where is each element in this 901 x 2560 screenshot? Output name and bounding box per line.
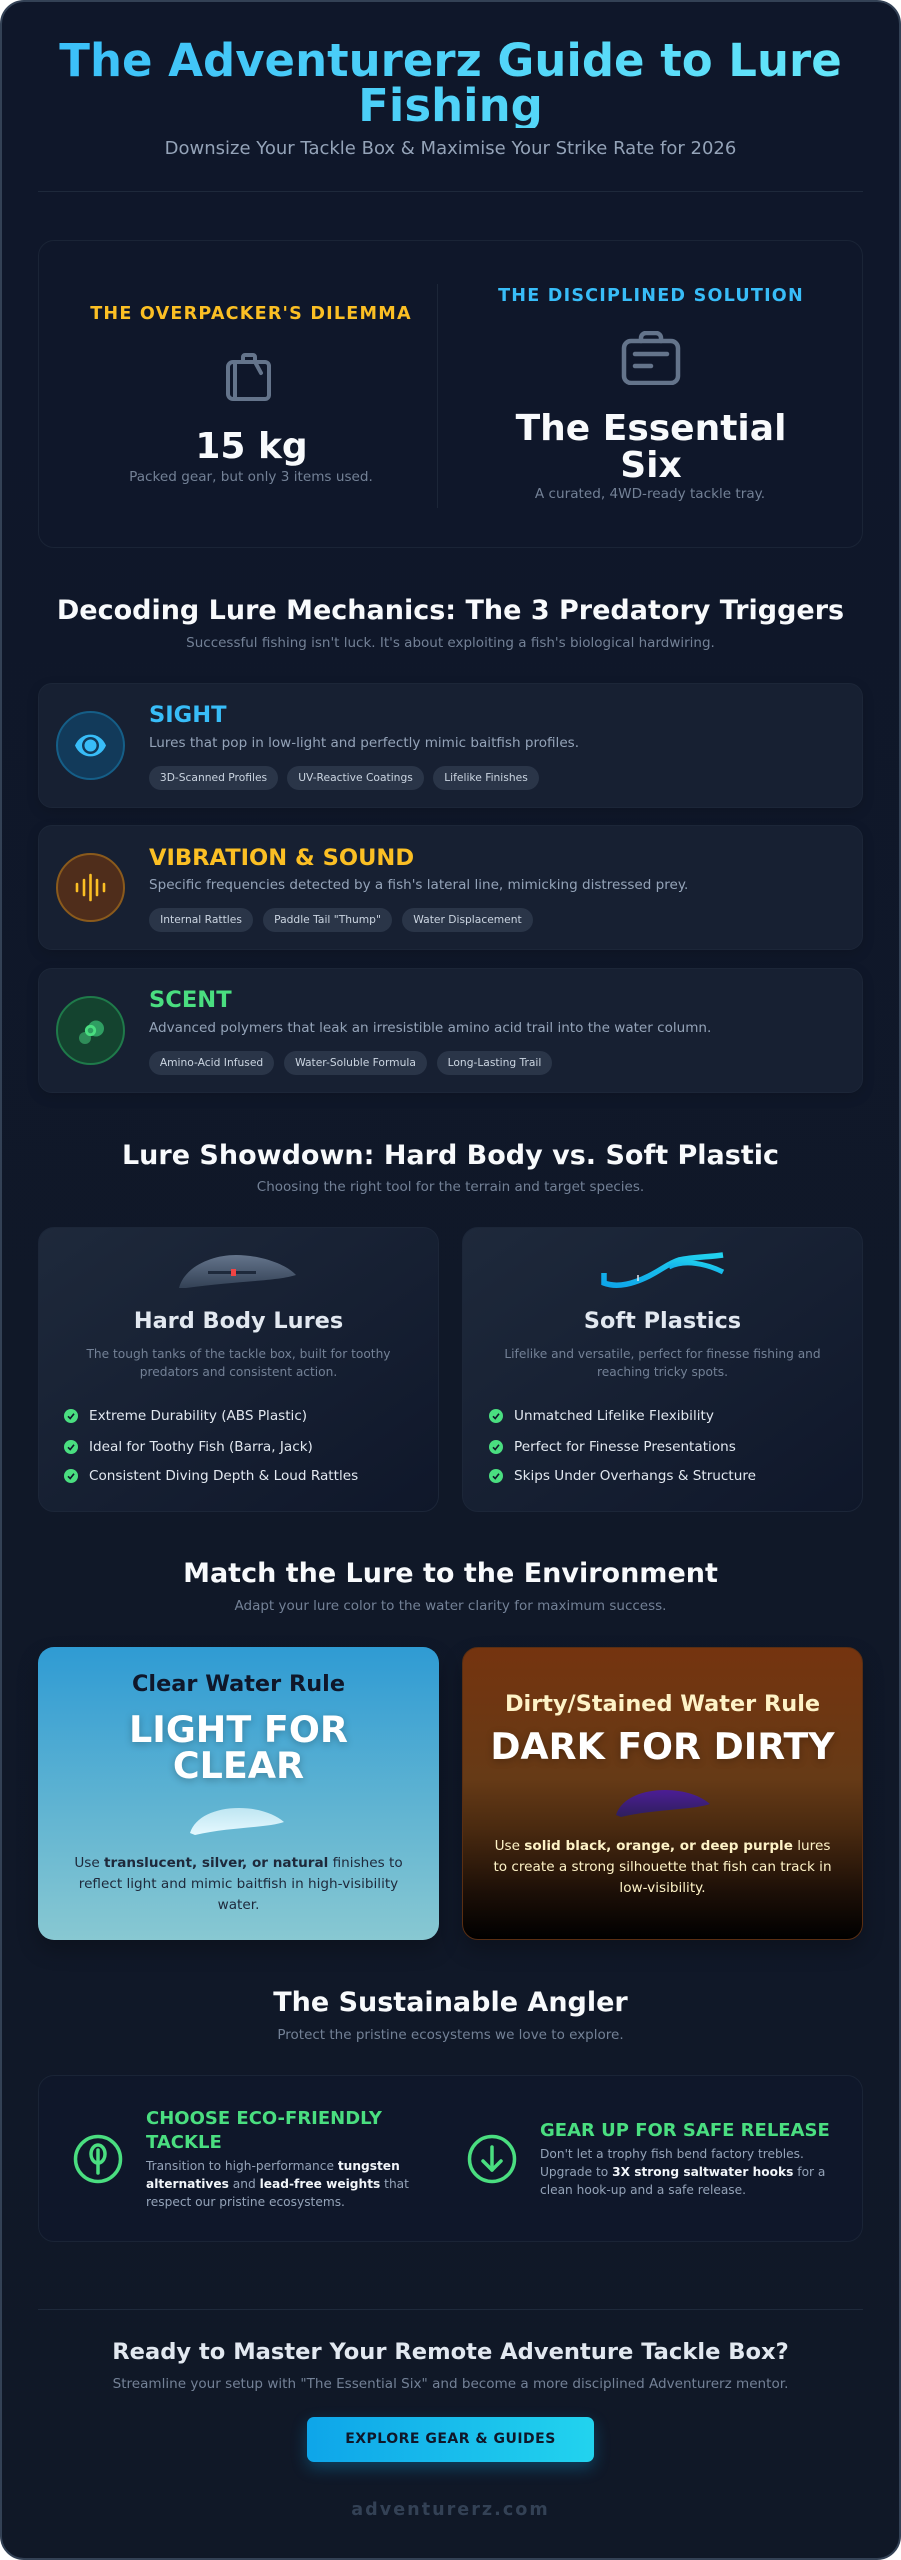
subheading: match the lure: Adapt your lure color to the water clarity for maximum success. xyxy=(235,1598,666,1614)
dirty water description: to create a strong silhouette that fish can track in xyxy=(493,1859,832,1875)
tag: UV-Reactive Coatings xyxy=(298,771,413,784)
soft plastics description: Lifelike and versatile, perfect for finesse fishing and xyxy=(504,1347,821,1361)
clear water title: Clear Water Rule xyxy=(132,1671,345,1697)
eco title xyxy=(146,2108,382,2153)
clear water slogan: LIGHT FOR xyxy=(129,1708,348,1751)
dirty water description xyxy=(493,1838,832,1896)
clear water description: Use translucent, silver, or natural finishes to xyxy=(74,1855,403,1871)
benefit: Unmatched Lifelike Flexibility xyxy=(514,1408,714,1424)
tag: Internal Rattles xyxy=(160,913,242,926)
soft plastics description: reaching tricky spots. xyxy=(597,1365,728,1379)
icon: safe release xyxy=(468,2134,516,2184)
clear water description xyxy=(74,1855,403,1913)
hard body description: The tough tanks of the tackle box, built for toothy xyxy=(86,1347,391,1361)
subheading: lure mechanics: Successful fishing isn't luck. It's about exploiting a fish's biological hardwiring. xyxy=(186,635,715,651)
icon: eco tackle xyxy=(74,2134,122,2184)
cta heading: Ready to Master Your Remote Adventure Tackle Box? xyxy=(112,2339,789,2365)
release description xyxy=(540,2147,825,2197)
tag xyxy=(402,908,533,932)
soft plastics title: Soft Plastics xyxy=(584,1308,741,1334)
tag: 3D-Scanned Profiles xyxy=(160,771,267,784)
tag: Paddle Tail "Thump" xyxy=(274,913,381,926)
tag xyxy=(149,1051,274,1075)
eco description: respect our pristine ecosystems. xyxy=(146,2195,345,2209)
icon: soft plastic lure xyxy=(601,1252,724,1288)
cta button: EXPLORE GEAR & GUIDES xyxy=(345,2431,556,2447)
icon: dark lure xyxy=(616,1790,710,1817)
panel: sustainability xyxy=(38,2075,863,2242)
tag xyxy=(284,1051,427,1075)
tag xyxy=(149,908,253,932)
tag xyxy=(433,766,539,790)
overpacker heading: THE OVERPACKER'S DILEMMA xyxy=(90,304,412,324)
panel: dirty water rule xyxy=(462,1647,863,1940)
card: scent xyxy=(38,968,863,1093)
benefit: Consistent Diving Depth & Loud Rattles xyxy=(89,1468,358,1484)
vibration description: Specific frequencies detected by a fish's lateral line, mimicking distressed prey. xyxy=(149,877,688,893)
benefit list xyxy=(489,1408,756,1484)
heading: sustainable angler: The Sustainable Angler xyxy=(273,1987,628,2018)
heading: lure showdown: Lure Showdown: Hard Body vs. Soft Plastic xyxy=(122,1140,779,1171)
dirty water title: Dirty/Stained Water Rule xyxy=(505,1691,820,1717)
icon: tackle case xyxy=(622,331,680,385)
dirty water description: low-visibility. xyxy=(619,1880,706,1896)
icon: light lure xyxy=(190,1808,284,1835)
dirty water slogan: DARK FOR DIRTY xyxy=(490,1725,835,1768)
tag xyxy=(263,908,392,932)
clear water slogan xyxy=(128,1708,348,1787)
solution caption: A curated, 4WD-ready tackle tray. xyxy=(535,486,765,502)
sight description: Lures that pop in low-light and perfectly mimic baitfish profiles. xyxy=(149,735,579,751)
hard body title: Hard Body Lures xyxy=(134,1308,343,1334)
tag: Water-Soluble Formula xyxy=(295,1056,416,1069)
release description: Upgrade to 3X strong saltwater hooks for a xyxy=(540,2165,825,2179)
subtitle: Downsize Your Tackle Box & Maximise Your Strike Rate for 2026 xyxy=(165,138,736,159)
icon: overfull bag xyxy=(226,353,271,401)
clear water description: water. xyxy=(218,1897,259,1913)
clear water description: reflect light and mimic baitfish in high-visibility xyxy=(79,1876,398,1892)
soft plastics description xyxy=(504,1347,821,1379)
stat: 15 kg: 15 kg xyxy=(195,426,308,467)
benefit: Skips Under Overhangs & Structure xyxy=(514,1468,756,1484)
solution heading: THE DISCIPLINED SOLUTION xyxy=(498,286,804,306)
icon: eye xyxy=(56,711,125,780)
heading: match the lure: Match the Lure to the Environment xyxy=(183,1558,718,1589)
overpacker caption: Packed gear, but only 3 items used. xyxy=(129,469,373,485)
cta button xyxy=(307,2417,594,2462)
tag: Lifelike Finishes xyxy=(444,771,528,784)
title: The Adventurerz Guide to Lure Fishing xyxy=(59,34,842,132)
clear water slogan: CLEAR xyxy=(173,1744,304,1787)
icon: sound wave xyxy=(56,853,125,922)
benefit: Perfect for Finesse Presentations xyxy=(514,1438,736,1454)
icon: hard body lure xyxy=(179,1255,296,1288)
panel: soft plastics xyxy=(462,1227,863,1512)
eco description: alternatives and lead-free weights that xyxy=(146,2177,409,2191)
benefit: Ideal for Toothy Fish (Barra, Jack) xyxy=(89,1438,313,1454)
release description: clean hook-up and a safe release. xyxy=(540,2183,746,2197)
tag xyxy=(437,1051,552,1075)
solution title: Six xyxy=(620,445,682,486)
benefit: Extreme Durability (ABS Plastic) xyxy=(89,1408,307,1424)
eco description: Transition to high-performance tungsten xyxy=(146,2159,400,2173)
subheading: lure showdown: Choosing the right tool for the terrain and target species. xyxy=(257,1179,644,1195)
card: vibration and sound xyxy=(38,825,863,950)
release description: Don't let a trophy fish bend factory trebles. xyxy=(540,2147,804,2161)
solution title: The Essential xyxy=(516,408,786,449)
tag: Long-Lasting Trail xyxy=(448,1056,541,1069)
benefit list xyxy=(64,1408,358,1484)
footer domain: adventurerz.com xyxy=(351,2500,550,2520)
tag: Amino-Acid Infused xyxy=(160,1056,263,1069)
eco title: TACKLE xyxy=(146,2132,222,2153)
panel: clear water rule xyxy=(38,1647,439,1940)
eco description xyxy=(146,2159,409,2209)
tag: Water Displacement xyxy=(413,913,522,926)
panel: hard body lures xyxy=(38,1227,439,1512)
hard body description: predators and consistent action. xyxy=(140,1365,337,1379)
panel: overpacker vs solution xyxy=(38,240,863,548)
release title: GEAR UP FOR SAFE RELEASE xyxy=(540,2120,830,2141)
tag xyxy=(149,766,278,790)
card: sight xyxy=(38,683,863,808)
sight title: SIGHT xyxy=(149,702,227,728)
solution title xyxy=(516,408,786,486)
cta text: Streamline your setup with "The Essential Six" and become a more disciplined Adventurerz mentor. xyxy=(113,2376,788,2392)
eco title: CHOOSE ECO-FRIENDLY xyxy=(146,2108,382,2129)
icon: scent droplets xyxy=(56,996,125,1065)
hard body description xyxy=(86,1347,391,1379)
scent description: Advanced polymers that leak an irresistible amino acid trail into the water column. xyxy=(149,1020,711,1036)
scent title: SCENT xyxy=(149,987,232,1013)
heading: lure mechanics: Decoding Lure Mechanics: The 3 Predatory Triggers xyxy=(57,595,844,626)
tag xyxy=(287,766,424,790)
dirty water description: Use solid black, orange, or deep purple lures xyxy=(495,1838,830,1854)
vibration title: VIBRATION & SOUND xyxy=(149,845,414,871)
subheading: sustainable angler: Protect the pristine ecosystems we love to explore. xyxy=(277,2027,624,2043)
